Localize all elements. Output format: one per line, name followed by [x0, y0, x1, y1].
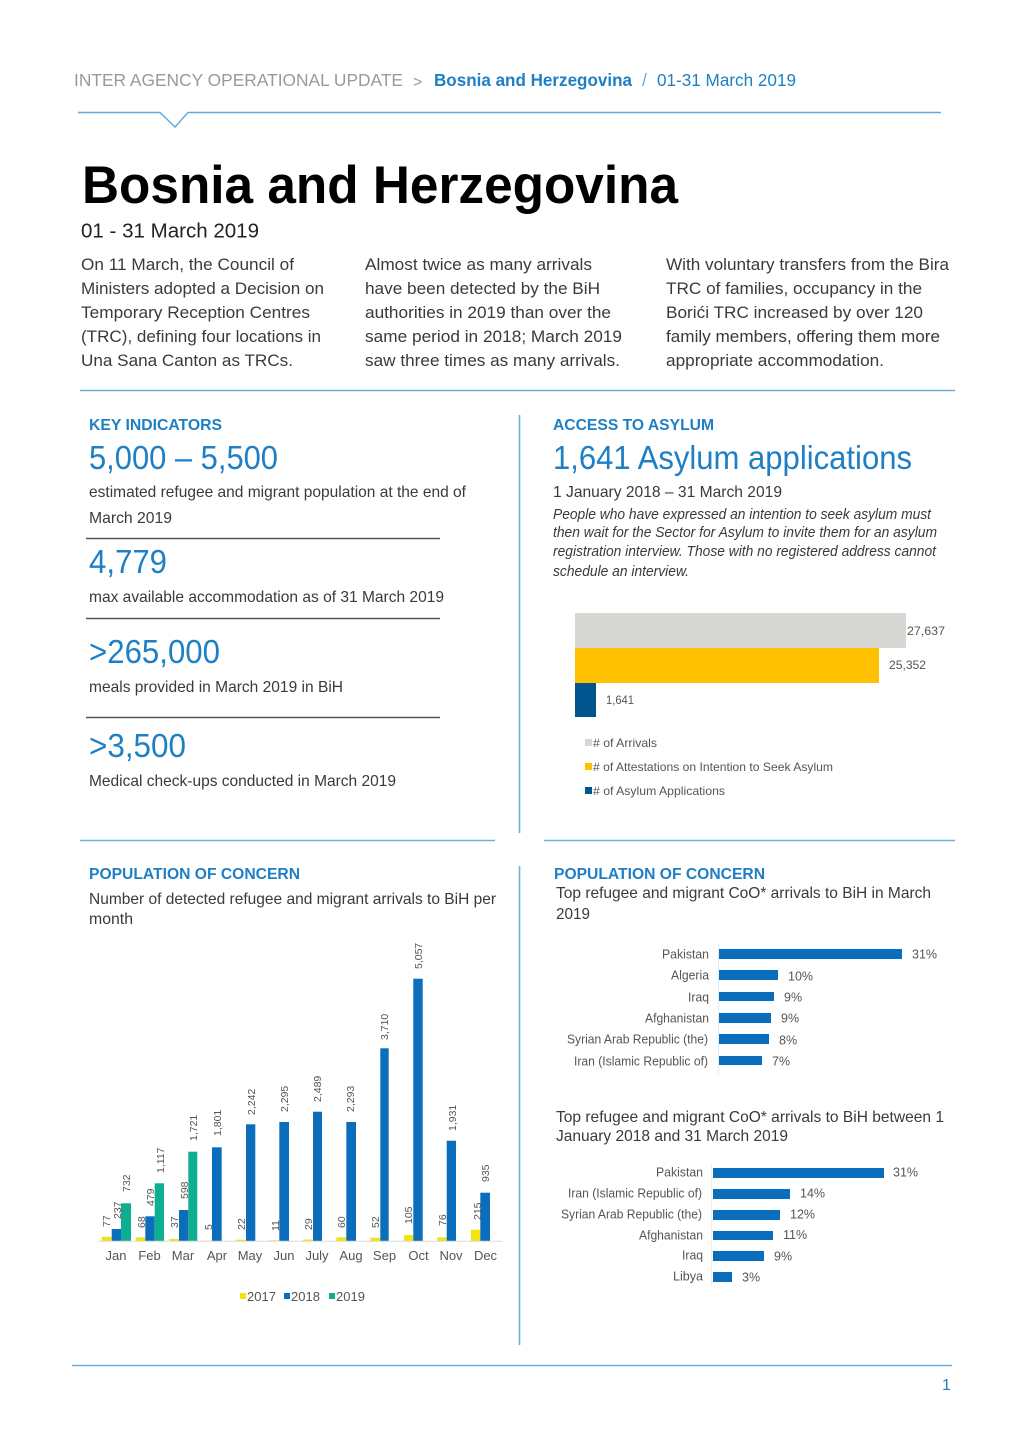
monthly arrivals description: Number of detected refugee and migrant arrivals to BiH per	[89, 891, 497, 908]
bar value labels: 1,931	[447, 1105, 459, 1131]
header breadcrumb: Bosnia and Herzegovina	[434, 70, 632, 90]
intro column 3: TRC of families, occupancy in the	[666, 279, 922, 298]
intro column 3: appropriate accommodation.	[666, 351, 884, 370]
cumulative country bar chart: 14%	[800, 1186, 825, 1200]
cumulative country bar chart: Libya	[673, 1268, 704, 1284]
intro column 1	[81, 255, 324, 370]
bar value labels: 60	[336, 1216, 348, 1228]
asylum chart legend	[585, 736, 833, 798]
monthly chart legend: 2017	[247, 1289, 276, 1304]
asylum applications figure: 1,641 Asylum applications	[553, 439, 912, 476]
bar value labels: 2,489	[312, 1076, 324, 1102]
bar value labels: 5	[203, 1224, 215, 1230]
March country bar chart: Iran (Islamic Republic of)	[574, 1054, 708, 1068]
indicator: meals: >265,000	[89, 633, 220, 670]
asylum chart legend: # of Arrivals	[593, 736, 657, 750]
indicator: meals	[89, 633, 343, 696]
month axis labels: Jan	[106, 1248, 126, 1263]
month axis labels: May	[238, 1248, 263, 1263]
heading: population of concern: POPULATION OF CONCERN	[554, 866, 765, 883]
cumulative country bar chart: 11%	[783, 1228, 807, 1242]
intro column 2: have been detected by the BiH	[365, 279, 600, 298]
cumulative country bar chart: Syrian Arab Republic (the)	[561, 1206, 702, 1222]
monthly arrivals bar chart	[98, 943, 502, 1263]
indicator: medical check-ups: >3,500	[89, 727, 186, 764]
month axis labels: Sep	[373, 1248, 396, 1263]
bar value labels: 22	[236, 1218, 248, 1230]
asylum bar chart: 1,641	[606, 693, 634, 707]
bar value labels: 1,117	[155, 1147, 167, 1173]
March country bar chart: Iraq	[688, 990, 709, 1004]
intro column 2: same period in 2018; March 2019	[365, 327, 622, 346]
March chart title	[556, 885, 931, 923]
intro column 1: On 11 March, the Council of	[81, 255, 294, 274]
cumulative country bar chart: 12%	[790, 1208, 815, 1222]
cumulative country bar chart: Iraq	[682, 1248, 703, 1262]
indicator: medical check-ups: Medical check-ups conducted in March 2019	[89, 773, 396, 790]
panel: key indicators	[86, 417, 467, 790]
monthly chart legend: 2018	[291, 1289, 320, 1304]
header breadcrumb: INTER AGENCY OPERATIONAL UPDATE	[74, 70, 403, 90]
header notched rule	[78, 112, 941, 127]
cumulative chart title: Top refugee and migrant CoO* arrivals to BiH between 1	[556, 1109, 944, 1126]
March country bar chart: Pakistan	[662, 946, 709, 962]
March chart title: Top refugee and migrant CoO* arrivals to BiH in March	[556, 885, 931, 902]
asylum note	[553, 507, 937, 580]
panel: monthly arrivals	[89, 866, 502, 1304]
month axis labels: Mar	[172, 1248, 195, 1263]
indicator: population: March 2019	[89, 510, 172, 527]
March country bar chart: Afghanistan	[645, 1010, 709, 1026]
page number: 1	[942, 1377, 951, 1394]
bar value labels: 2,295	[279, 1086, 291, 1112]
bar value labels: 37	[169, 1216, 181, 1228]
monthly chart legend	[240, 1289, 365, 1304]
March country bar chart: Syrian Arab Republic (the)	[567, 1032, 708, 1046]
header breadcrumb	[74, 70, 796, 91]
month axis labels: Feb	[138, 1248, 161, 1263]
bar value labels: 77	[101, 1215, 113, 1227]
bar value labels: 11	[270, 1220, 282, 1231]
heading: access to asylum: ACCESS TO ASYLUM	[553, 417, 714, 434]
panel: access to asylum	[553, 417, 945, 798]
intro column 1: (TRC), defining four locations in	[81, 327, 321, 346]
header breadcrumb: /	[642, 70, 647, 90]
March country bar chart: 10%	[788, 970, 813, 984]
month axis labels: Apr	[207, 1248, 228, 1263]
heading: key indicators: KEY INDICATORS	[89, 417, 222, 434]
cumulative country bar chart: 31%	[893, 1166, 918, 1180]
intro column 2	[365, 255, 622, 370]
bar value labels: 3,710	[379, 1014, 391, 1040]
month axis labels: July	[305, 1248, 329, 1263]
cumulative country bar chart: Pakistan	[656, 1164, 703, 1180]
subtitle date: 01 - 31 March 2019	[81, 220, 259, 242]
intro column 2: Almost twice as many arrivals	[365, 255, 592, 274]
asylum bar chart	[575, 613, 945, 717]
indicator: population	[89, 439, 467, 527]
heading: population of concern: POPULATION OF CONCERN	[89, 866, 300, 883]
bar value labels: 2,242	[246, 1089, 258, 1115]
intro column 1: Una Sana Canton as TRCs.	[81, 351, 293, 370]
bar value labels: 237	[112, 1201, 124, 1219]
panel: countries of origin	[554, 866, 944, 1286]
March country bar chart: Algeria	[671, 968, 710, 982]
month axis labels: Oct	[408, 1248, 429, 1263]
asylum chart legend: # of Asylum Applications	[593, 784, 725, 798]
bar value labels: 1,721	[188, 1115, 200, 1141]
cumulative country bar chart: Iran (Islamic Republic of)	[568, 1186, 702, 1200]
bar value labels: 76	[437, 1214, 449, 1226]
monthly chart legend: 2019	[336, 1289, 365, 1304]
March country bar chart	[567, 945, 937, 1075]
monthly arrivals description	[89, 891, 497, 928]
intro column 3: family members, offering them more	[666, 327, 940, 346]
bar value labels: 29	[303, 1218, 315, 1230]
bar value labels: 68	[136, 1216, 148, 1228]
asylum note: People who have expressed an intention to seek asylum must	[553, 507, 932, 523]
month axis labels: Dec	[474, 1248, 498, 1263]
indicator: accommodation: 4,779	[89, 543, 167, 580]
cumulative country bar chart: 9%	[774, 1250, 792, 1264]
bar value labels: 2,293	[345, 1086, 357, 1112]
month axis labels	[106, 1248, 498, 1263]
indicator: population: 5,000 – 5,500	[89, 439, 278, 476]
March country bar chart: 8%	[779, 1034, 797, 1048]
indicator: accommodation	[89, 543, 444, 606]
cumulative chart title: January 2018 and 31 March 2019	[556, 1128, 788, 1145]
bar value labels: 5,057	[413, 943, 425, 969]
month axis labels: Nov	[439, 1248, 463, 1263]
indicator: meals: meals provided in March 2019 in BiH	[89, 679, 343, 696]
asylum note: registration interview. Those with no registered address cannot	[553, 544, 937, 560]
March chart title: 2019	[556, 906, 590, 923]
asylum date range: 1 January 2018 – 31 March 2019	[553, 484, 782, 501]
asylum note: schedule an interview.	[553, 564, 689, 580]
asylum bar chart: 25,352	[889, 658, 926, 672]
title: Bosnia and Herzegovina	[82, 156, 679, 215]
bar value labels: 598	[179, 1181, 191, 1199]
header breadcrumb: 01-31 March 2019	[657, 70, 796, 90]
asylum note: then wait for the Sector for Asylum to invite them for an asylum	[553, 525, 937, 541]
intro column 2: authorities in 2019 than over the	[365, 303, 611, 322]
bar value labels: 105	[403, 1206, 415, 1224]
indicator: population: estimated refugee and migrant population at the end of	[89, 484, 467, 501]
bar value labels: 52	[370, 1216, 382, 1228]
bar value labels: 732	[121, 1174, 133, 1192]
intro column 3: Borići TRC increased by over 120	[666, 303, 923, 322]
March country bar chart: 9%	[784, 990, 802, 1004]
cumulative country bar chart	[561, 1164, 918, 1286]
month axis labels: Jun	[274, 1248, 294, 1263]
cumulative country bar chart: Afghanistan	[639, 1228, 703, 1242]
asylum chart legend: # of Attestations on Intention to Seek Asylum	[593, 760, 833, 774]
intro column 3: With voluntary transfers from the Bira	[666, 255, 950, 274]
bar value labels: 215	[472, 1202, 484, 1220]
indicator: accommodation: max available accommodation as of 31 March 2019	[89, 589, 444, 606]
March country bar chart: 7%	[772, 1054, 790, 1068]
bar value labels	[101, 943, 492, 1231]
intro column 1: Ministers adopted a Decision on	[81, 279, 324, 298]
intro column 3	[666, 255, 950, 370]
intro column 2: saw three times as many arrivals.	[365, 351, 620, 370]
month axis labels: Aug	[339, 1248, 363, 1263]
header breadcrumb: >	[413, 74, 422, 91]
bar value labels: 1,801	[212, 1110, 224, 1136]
bar value labels: 935	[480, 1164, 492, 1182]
March country bar chart: 31%	[912, 948, 937, 962]
monthly arrivals description: month	[89, 911, 133, 928]
March country bar chart: 9%	[781, 1012, 799, 1026]
indicator: medical check-ups	[89, 727, 396, 790]
cumulative chart title	[556, 1109, 944, 1145]
intro column 1: Temporary Reception Centres	[81, 303, 310, 322]
asylum bar chart: 27,637	[907, 624, 945, 638]
cumulative country bar chart: 3%	[742, 1270, 760, 1284]
bar value labels: 479	[145, 1188, 157, 1206]
